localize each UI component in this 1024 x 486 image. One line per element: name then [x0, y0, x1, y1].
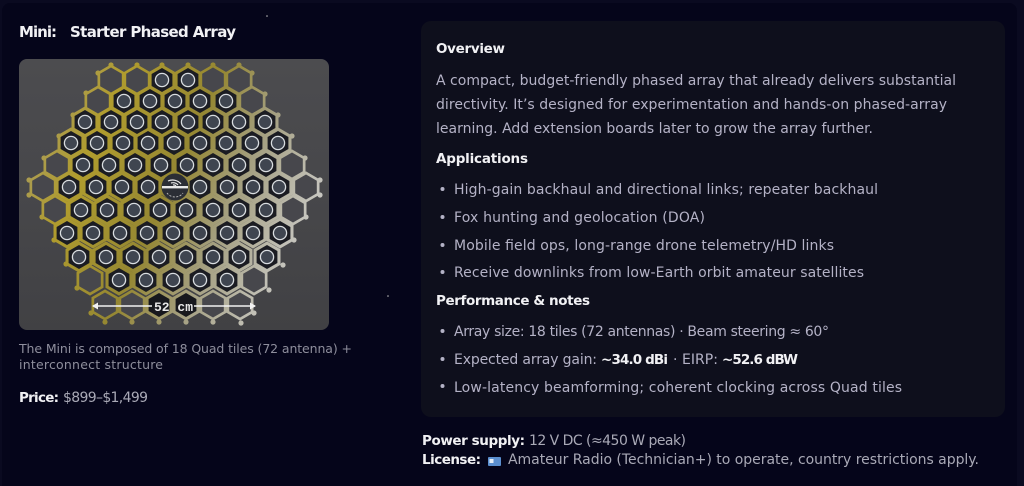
photo: Mini phased array hexagonal frame	[19, 59, 329, 330]
price	[19, 390, 148, 406]
performance list	[440, 324, 902, 396]
license line: License:	[422, 452, 481, 468]
heading: performance and notes: Performance & notes	[436, 293, 590, 309]
applications list	[440, 182, 878, 281]
applications list: Mobile field ops, long-range drone telemetry/HD links	[454, 238, 834, 254]
icon: centre logo	[162, 174, 188, 200]
performance list: ~52.6 dBW	[722, 352, 798, 368]
performance list: ~34.0 dBi	[601, 352, 668, 368]
price: Price:	[19, 390, 59, 406]
applications list: Receive downlinks from low-Earth orbit amateur satellites	[454, 265, 864, 281]
performance list: Expected array gain:	[454, 352, 597, 368]
power supply line	[422, 433, 686, 449]
image caption	[18, 341, 352, 372]
heading: applications: Applications	[436, 151, 528, 167]
power supply line: Power supply:	[422, 433, 525, 449]
price: $899–$1,499	[63, 390, 148, 406]
performance list: Array size: 18 tiles (72 antennas) · Beam steering ≈ 60°	[454, 324, 829, 340]
title: Starter Phased Array	[70, 23, 236, 41]
applications list: High-gain backhaul and directional links; repeater backhaul	[454, 182, 878, 198]
icon: license card	[488, 457, 501, 466]
overview text: learning. Add extension boards later to grow the array further.	[436, 121, 873, 137]
performance list: Low-latency beamforming; coherent clocking across Quad tiles	[454, 380, 902, 396]
overview text	[436, 73, 956, 137]
image caption: The Mini is composed of 18 Quad tiles (72 antenna) +	[18, 341, 352, 356]
panel: details	[421, 21, 1005, 417]
dimension arrow: 52 cm: 52 cm	[154, 300, 193, 315]
image caption: interconnect structure	[19, 357, 163, 372]
applications list: Fox hunting and geolocation (DOA)	[454, 210, 705, 226]
heading: overview: Overview	[436, 41, 505, 57]
overview text: A compact, budget-friendly phased array that already delivers substantial	[436, 73, 956, 89]
dimension arrow: 52 cm	[92, 300, 256, 315]
power supply line: 12 V DC (≈450 W peak)	[529, 433, 686, 449]
overview text: directivity. It’s designed for experimentation and hands-on phased-array	[436, 97, 947, 113]
license line: Amateur Radio (Technician+) to operate, country restrictions apply.	[508, 452, 979, 468]
title: Mini:	[19, 23, 57, 41]
performance list: · EIRP:	[673, 352, 718, 368]
